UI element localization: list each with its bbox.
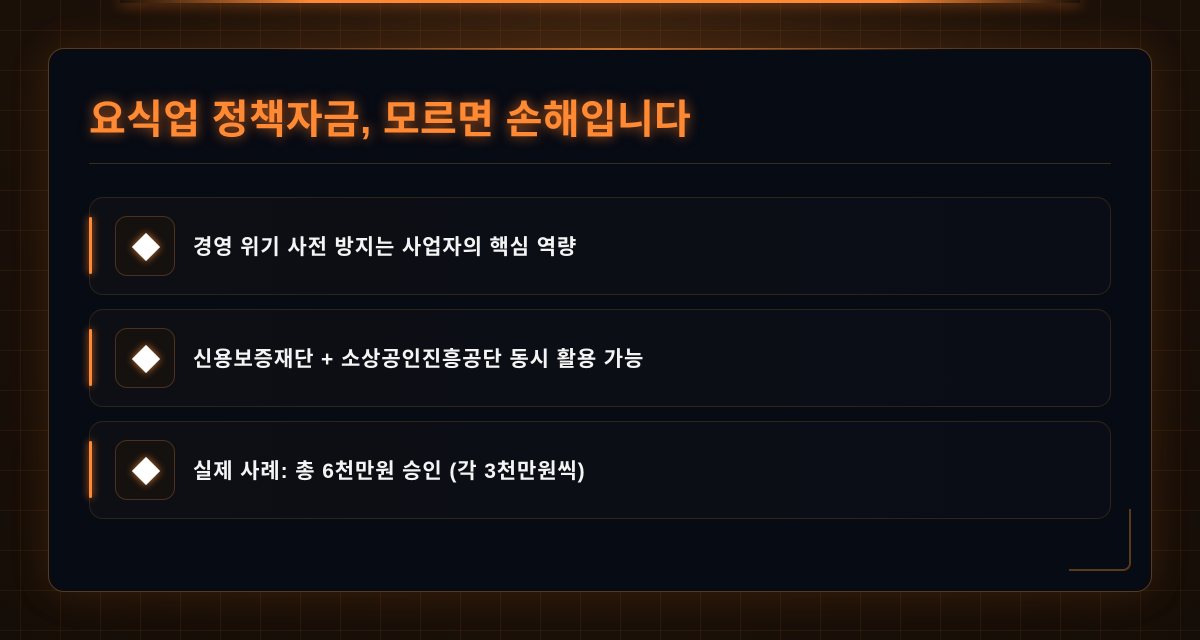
text 2: 신용보증재단 + 소상공인진흥공단 동시 활용 가능 <box>193 348 644 371</box>
icon: diamond <box>115 216 175 276</box>
title: 요식업 정책자금, 모르면 손해입니다 <box>89 98 691 142</box>
icon: diamond <box>115 440 175 500</box>
item 3 <box>89 421 1111 519</box>
icon: diamond <box>115 328 175 388</box>
item 1 <box>89 197 1111 295</box>
text 1: 경영 위기 사전 방지는 사업자의 핵심 역량 <box>193 236 577 259</box>
item 2 <box>89 309 1111 407</box>
panel: main card <box>48 48 1152 592</box>
text 3: 실제 사례: 총 6천만원 승인 (각 3천만원씩) <box>193 460 586 483</box>
